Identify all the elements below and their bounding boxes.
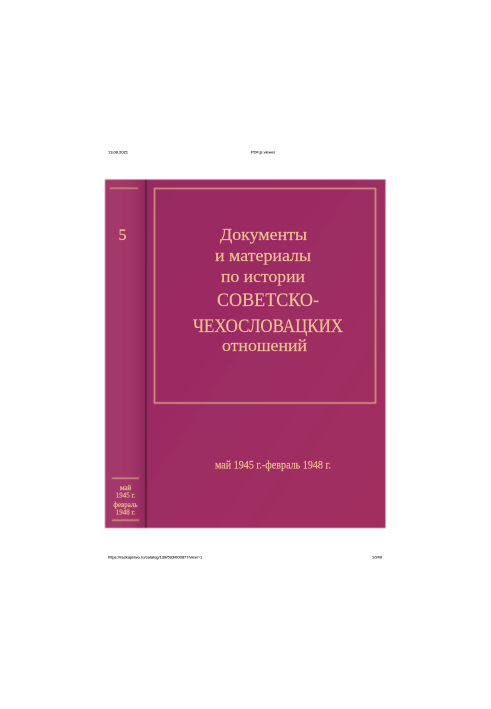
cover: front frame <box>154 188 376 403</box>
cover: spine hinge <box>145 180 147 528</box>
spine dates: февраль <box>113 501 138 509</box>
cover: spine panel <box>105 180 146 528</box>
spine dates: 1945 г. <box>116 492 136 500</box>
title: по истории <box>221 267 305 286</box>
page header: viewer name: PDF.js viewer <box>251 150 276 154</box>
cover: front panel <box>146 180 386 528</box>
page footer: page number: 1/249 <box>372 554 383 560</box>
cover text <box>113 225 343 516</box>
title: отношений <box>222 336 307 355</box>
title: Документы <box>220 225 307 244</box>
title <box>193 225 343 355</box>
spine dates: май <box>120 484 131 492</box>
page footer: url: https://rackapravo.ru/catalog/139/593/600877/view=1 <box>108 554 203 560</box>
spine dates <box>113 484 138 516</box>
page header: date: 13.08.2021 <box>108 150 129 154</box>
title: ЧЕХОСЛОВАЦКИХ <box>193 316 343 337</box>
date range: май 1945 г.-февраль 1948 г. <box>215 460 331 472</box>
book cover <box>105 180 386 528</box>
cover: spine bottom rules <box>112 478 139 521</box>
title: СОВЕТСКО- <box>217 290 319 311</box>
title: и материалы <box>215 246 311 265</box>
cover: spine top rule <box>110 187 138 190</box>
spine dates: 1948 г. <box>116 508 136 516</box>
spine volume number: 5 <box>118 227 126 244</box>
